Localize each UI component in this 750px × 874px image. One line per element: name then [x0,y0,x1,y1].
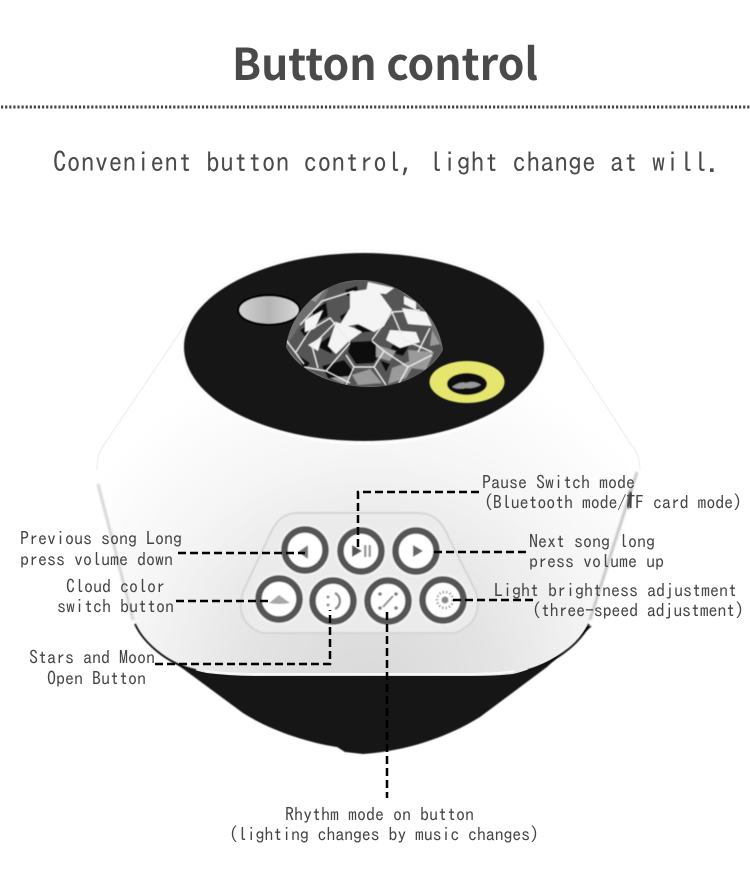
housing edge shading [97,300,640,674]
button: brightness [417,574,469,626]
top black disc [180,249,548,445]
label: stars and moon: Open Button [47,670,146,688]
subtitle: Convenient button control, light change at will. [53,149,721,176]
label: next song: Next song long [529,533,655,551]
moon lens [237,294,301,326]
label: stars and moon: Stars and Moon [29,649,155,667]
button: next [390,525,442,577]
button: previous [279,524,331,576]
label: cloud color: Cloud color [66,578,165,596]
button: cloud color [253,573,305,625]
label: previous song: press volume down [20,551,173,569]
label: pause switch mode: Pause Switch mode [482,474,635,492]
button: stars and moon [307,575,359,627]
button panel [241,513,478,633]
crystal dome [286,280,443,387]
button: rhythm mode [362,575,414,627]
white housing [97,261,640,676]
label: rhythm mode: Rhythm mode on button [285,806,474,824]
product: galaxy projector [97,249,640,754]
label: next song: press volume up [529,553,664,571]
speaker ring [430,361,504,403]
callout leader lines [155,492,533,798]
label: cloud color: switch button [57,598,174,616]
label: light brightness: Light brightness adjustment [494,582,737,600]
label: rhythm mode detail: (lighting changes by music changes) [229,825,539,844]
title: Button control [232,29,538,93]
button: play pause [335,525,387,577]
label: pause switch mode detail: (Bluetooth mode/TF card mode) [484,493,742,512]
label: brightness detail: (three-speed adjustment) [532,601,744,620]
label: previous song: Previous song Long [20,530,182,548]
black base [137,626,592,754]
